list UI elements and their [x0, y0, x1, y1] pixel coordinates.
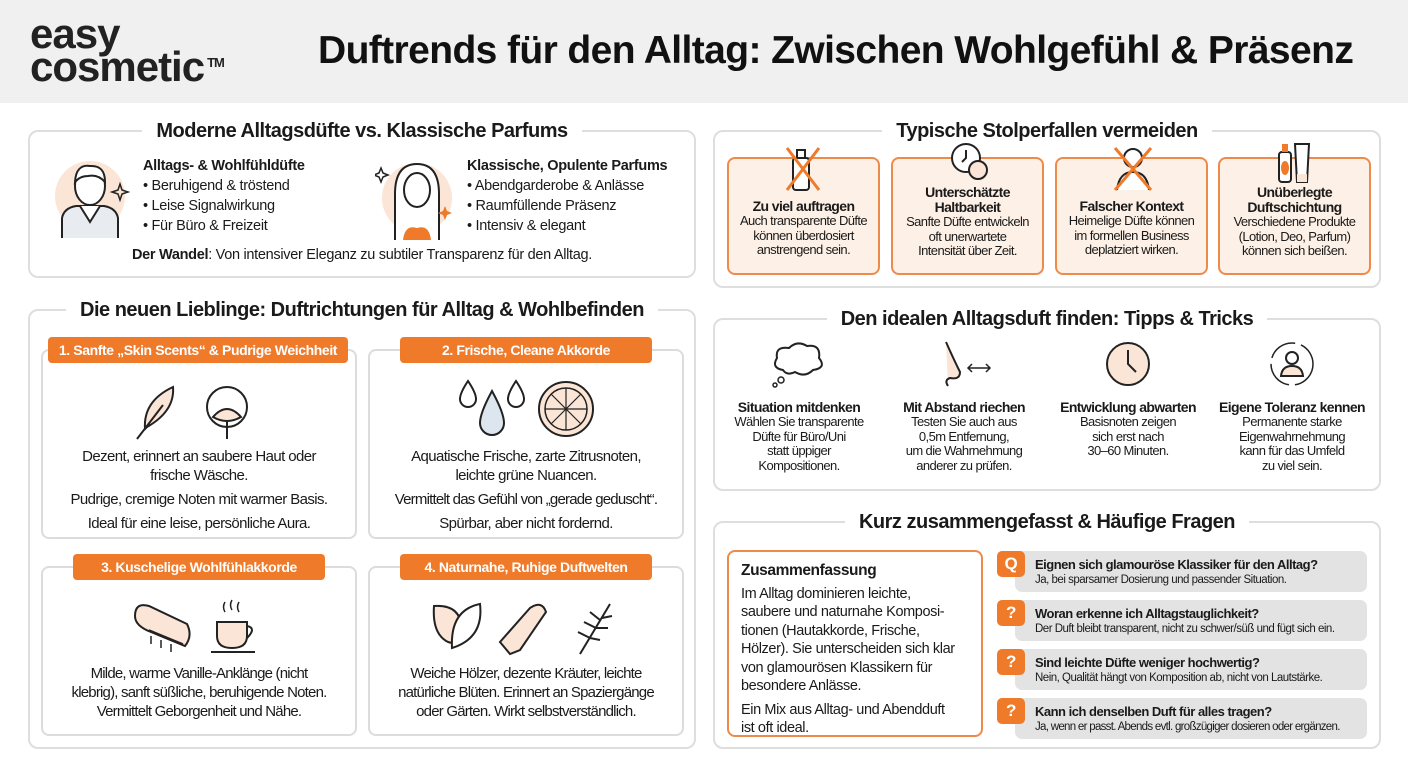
icon: spray crossed — [786, 147, 820, 191]
faq 1: Ja, bei sparsamer Dosierung und passender Situation. — [1035, 574, 1286, 586]
panel: pitfalls — [713, 130, 1381, 288]
tip 1: Kompositionen. — [758, 458, 840, 472]
panel: modern vs classic — [28, 130, 696, 278]
text — [71, 448, 327, 532]
pitfall 3 — [1055, 157, 1208, 275]
pitfall 4 — [1218, 157, 1371, 275]
label 2: 2. Frische, Cleane Akkorde — [442, 342, 610, 358]
panel: summary & FAQ: ? — [1006, 701, 1016, 720]
label 3: 3. Kuschelige Wohlfühlakkorde — [101, 559, 297, 575]
faq 2 — [1015, 600, 1367, 641]
panel: summary & FAQ: ? — [1006, 652, 1016, 671]
card 2 — [368, 349, 684, 539]
heading: Den idealen Alltagsduft finden: Tipps & Tricks — [841, 308, 1253, 330]
pitfall 2: oft unerwartete — [929, 228, 1006, 244]
summary box: tionen (Hautakkorde, Frische, — [741, 622, 920, 638]
text: Ideal für eine leise, persönliche Aura. — [88, 515, 310, 532]
icon: clock pill — [951, 143, 988, 180]
tip 4 — [1219, 342, 1365, 472]
tip 2 — [903, 342, 1025, 472]
label 1: 1. Sanfte „Skin Scents“ & Pudrige Weichheit — [59, 342, 337, 358]
text: everyday: • Für Büro & Freizeit — [143, 218, 267, 234]
label 3 — [73, 554, 325, 580]
panel: summary & FAQ: Q — [1005, 554, 1017, 573]
faq 4: Kann ich denselben Duft für alles tragen? — [1035, 704, 1272, 719]
faq 4 — [1015, 698, 1367, 739]
text — [72, 665, 326, 720]
title: Duftrends für den Alltag: Zwischen Wohlgefühl & Präsenz — [318, 29, 1353, 72]
tip 2: Mit Abstand riechen — [903, 399, 1025, 415]
summary box: Ein Mix aus Alltag- und Abendduft — [741, 702, 945, 718]
faq 3: Nein, Qualität hängt von Komposition ab, nicht von Lautstärke. — [1035, 672, 1322, 684]
faq 4: Ja, wenn er passt. Abends evtl. großzügiger dosieren oder ergänzen. — [1035, 721, 1340, 733]
label 1 — [48, 337, 348, 363]
pitfall 4: Unüberlegte — [1257, 184, 1332, 200]
text: everyday: Alltags- & Wohlfühldüfte — [143, 158, 305, 174]
label 2 — [400, 337, 652, 363]
pitfall 4: Verschiedene Produkte — [1234, 214, 1355, 229]
tip 2: 0,5m Entfernung, — [919, 428, 1009, 444]
header band — [0, 0, 1408, 103]
pitfall 3: deplatziert wirken. — [1085, 242, 1178, 257]
pitfall 1: anstrengend sein. — [757, 242, 850, 257]
tip 1: Düfte für Büro/Uni — [752, 428, 846, 444]
logo: cosmeticTM — [30, 43, 224, 90]
text: classic — [467, 158, 667, 234]
panel: new favourites — [28, 309, 696, 749]
pitfall 3: Falscher Kontext — [1080, 198, 1184, 214]
tip 4: kann für das Umfeld — [1240, 443, 1344, 458]
tip 3: sich erst nach — [1092, 428, 1164, 444]
pitfall 1: Zu viel auftragen — [753, 198, 854, 214]
tip 1: Situation mitdenken — [738, 399, 860, 415]
pitfall 4: können sich beißen. — [1242, 243, 1347, 258]
tip 1 — [734, 342, 864, 472]
text: change: Der Wandel: Von intensiver Eleganz zu subtiler Transparenz für den Alltag. — [132, 247, 592, 263]
tip 3: Basisnoten zeigen — [1080, 414, 1176, 429]
text: classic: Klassische, Opulente Parfums — [467, 158, 667, 174]
summary box: besondere Anlässe. — [741, 678, 861, 694]
tip 4: Permanente starke — [1242, 414, 1342, 429]
faq 3: Sind leichte Düfte weniger hochwertig? — [1035, 655, 1259, 670]
icon: man — [55, 161, 130, 238]
logo — [30, 10, 224, 90]
tip 4: zu viel sein. — [1262, 458, 1322, 472]
summary box — [727, 550, 983, 737]
label 4 — [400, 554, 652, 580]
faq 3 — [1015, 649, 1367, 690]
text — [394, 448, 657, 532]
summary box: ist oft ideal. — [741, 720, 809, 736]
text: classic: • Abendgarderobe & Anlässe — [467, 178, 644, 194]
pitfall 2: Haltbarkeit — [935, 199, 1000, 215]
text: Milde, warme Vanille-Anklänge (nicht — [91, 665, 307, 682]
pitfall 2: Unterschätzte — [925, 184, 1010, 200]
text: everyday: • Beruhigend & tröstend — [143, 178, 290, 194]
panel: summary & FAQ — [713, 521, 1381, 749]
pitfall 2: Intensität über Zeit. — [918, 243, 1017, 258]
pitfall 4: Duftschichtung — [1247, 199, 1342, 215]
pitfall 1 — [727, 157, 880, 275]
summary box: Zusammenfassung — [741, 562, 876, 579]
heading: Moderne Alltagsdüfte vs. Klassische Parfums — [156, 120, 568, 142]
text: classic: • Intensiv & elegant — [467, 218, 585, 234]
heading: Die neuen Lieblinge: Duftrichtungen für Alltag & Wohlbefinden — [80, 299, 644, 321]
icon: woman — [375, 163, 452, 240]
text: everyday — [143, 158, 305, 234]
text: classic: • Raumfüllende Präsenz — [467, 198, 616, 214]
tip 2: anderer zu prüfen. — [916, 458, 1012, 472]
tip 4: Eigene Toleranz kennen — [1219, 399, 1365, 415]
card 1 — [41, 349, 357, 539]
text: Weiche Hölzer, dezente Kräuter, leichte — [410, 665, 642, 682]
text: Pudrige, cremige Noten mit warmer Basis. — [71, 491, 327, 508]
icon: feather and cotton — [136, 386, 248, 440]
text: Aquatische Frische, zarte Zitrusnoten, — [411, 448, 641, 465]
pitfall 4: (Lotion, Deo, Parfum) — [1239, 228, 1350, 244]
icon: leaf wood herbs — [432, 602, 612, 656]
faq 2: Woran erkenne ich Alltagstauglichkeit? — [1035, 606, 1259, 621]
text: Vermittelt das Gefühl von „gerade geduscht“. — [395, 491, 657, 508]
tip 2: Testen Sie auch aus — [911, 414, 1017, 429]
text: natürliche Blüten. Erinnert an Spaziergänge — [398, 684, 654, 701]
faq 1 — [1015, 551, 1367, 592]
tip 1: Wählen Sie transparente — [734, 414, 864, 429]
panel: tips — [713, 318, 1381, 491]
pitfall 1: Auch transparente Düfte — [740, 213, 867, 228]
tip 2: um die Wahrnehmung — [906, 443, 1022, 458]
heading: Typische Stolperfallen vermeiden — [896, 120, 1198, 142]
icon: bottles — [1278, 143, 1310, 183]
text: Spürbar, aber nicht fordernd. — [439, 515, 613, 532]
tip 4: Eigenwahrnehmung — [1239, 428, 1345, 444]
panel: summary & FAQ: ? — [1006, 603, 1016, 622]
text: frische Wäsche. — [150, 467, 248, 484]
summary box: von glamourösen Klassikern für — [741, 660, 932, 676]
tip 3: Entwicklung abwarten — [1060, 399, 1196, 415]
text — [398, 665, 654, 720]
icon: blanket and tea — [134, 600, 255, 653]
faq 1: Eignen sich glamouröse Klassiker für den Alltag? — [1035, 557, 1318, 572]
icon: person crossed — [1114, 147, 1152, 191]
pitfall 3: im formellen Business — [1074, 228, 1189, 242]
pitfall 2: Sanfte Düfte entwickeln — [906, 214, 1029, 229]
tip 1: statt üppiger — [767, 443, 831, 458]
summary box: Im Alltag dominieren leichte, — [741, 586, 911, 602]
card 3 — [41, 566, 357, 736]
pitfall 3: Heimelige Düfte können — [1069, 213, 1194, 228]
icon: drops and citrus — [459, 379, 594, 437]
tip 3 — [1060, 342, 1196, 458]
card 4 — [368, 566, 684, 736]
text: Vermittelt Geborgenheit und Nähe. — [97, 703, 301, 720]
faq 2: Der Duft bleibt transparent, nicht zu schwer/süß und fügt sich ein. — [1035, 623, 1335, 635]
text: klebrig), sanft süßliche, beruhigende Noten. — [72, 684, 326, 701]
pitfall 1: können überdosiert — [753, 228, 854, 242]
text: leichte grüne Nuancen. — [455, 467, 597, 484]
label 4: 4. Naturnahe, Ruhige Duftwelten — [424, 559, 628, 575]
logo: easy — [30, 10, 119, 57]
heading: Kurz zusammengefasst & Häufige Fragen — [859, 511, 1235, 533]
text: Dezent, erinnert an saubere Haut oder — [82, 448, 316, 465]
summary box: saubere und naturnahe Komposi- — [741, 604, 944, 620]
tip 3: 30–60 Minuten. — [1087, 443, 1169, 458]
summary box: Hölzer). Sie unterscheiden sich klar — [741, 641, 955, 657]
pitfall 2 — [891, 157, 1044, 275]
text: oder Gärten. Wirkt selbstverständlich. — [416, 703, 636, 720]
text: everyday: • Leise Signalwirkung — [143, 198, 275, 214]
